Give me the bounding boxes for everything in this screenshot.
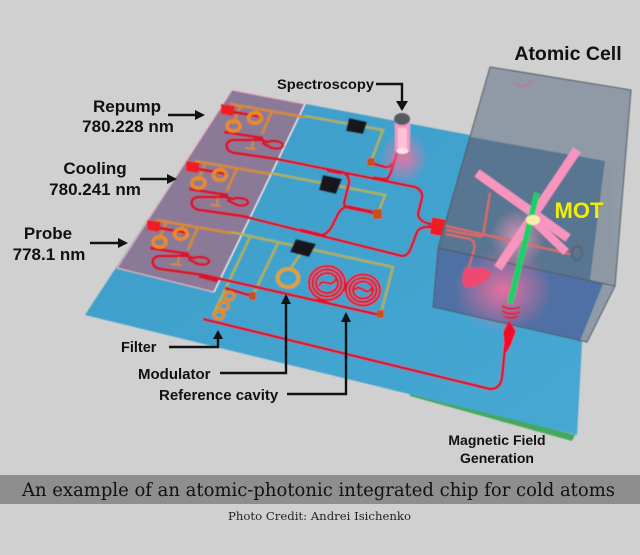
arrow: filter: [169, 330, 223, 347]
reference cavity spirals: [309, 266, 380, 306]
green beam: [510, 193, 537, 303]
probe laser unit: [147, 220, 231, 275]
yellow control lines: [213, 116, 393, 315]
cell right lower facet: [580, 284, 615, 342]
label: Probe: Probe: [24, 224, 72, 243]
label: Spectroscopy: Spectroscopy: [277, 77, 375, 92]
arrow: cooling: [140, 174, 177, 184]
top reflection: [515, 80, 532, 87]
overlay right border: [214, 104, 305, 292]
spectroscopy glow: [380, 132, 428, 184]
label: Magnetic Field Generation: Generation: [460, 450, 534, 466]
label: Probe: 778.1 nm: [13, 245, 85, 264]
pink beam 2: [477, 173, 568, 238]
cooling laser unit: [186, 161, 270, 216]
probe output stub: [199, 276, 218, 281]
arrow: spectroscopy: [376, 84, 408, 111]
MOT centre: [526, 215, 540, 225]
cell lower face: [433, 248, 615, 342]
cell right strip: [590, 161, 615, 286]
photo credit: Photo Credit: Andrei Isichenko: [228, 509, 411, 523]
pink beam 3: [535, 222, 566, 252]
pink glow: [453, 248, 553, 332]
arrow: modulator: [220, 294, 291, 373]
filter rings: [214, 292, 234, 319]
faded traces: [446, 193, 570, 280]
label: Repump: 780.228 nm: [82, 117, 174, 136]
label: Atomic Cell: Atomic Cell: [514, 43, 622, 65]
label: Cooling: Cooling: [63, 159, 127, 178]
caption band: [0, 475, 640, 504]
output coupler: [502, 306, 520, 318]
label: Reference cavity: Reference cavity: [159, 387, 279, 404]
magnetic field generation strip: [410, 391, 575, 441]
spectroscopy vapour cell: [394, 113, 410, 154]
arrow: reference cavity: [287, 312, 351, 394]
label: Cooling: 780.241 nm: [49, 180, 141, 199]
repump laser unit: [221, 104, 305, 159]
laser section overlay: [117, 90, 305, 292]
cell edges: [433, 67, 631, 342]
modulator chips: [290, 118, 367, 257]
output splitter block: [430, 217, 447, 237]
caption text: An example of an atomic-photonic integrated chip for cold atoms: [21, 479, 615, 501]
modulator ring: [278, 269, 298, 287]
chip substrate: [85, 90, 592, 435]
red waveguides: [203, 153, 505, 389]
atomic cell: [433, 67, 631, 342]
cell face over chip darkening: [438, 137, 605, 280]
arrow: probe: [90, 238, 128, 248]
chip artwork: [85, 67, 631, 441]
phase shifters: [249, 158, 384, 318]
repump bus thick stubs: [300, 170, 387, 235]
label: Magnetic Field Generation: Magnetic Field: [448, 432, 546, 448]
output taper: [503, 320, 516, 352]
label: Repump: Repump: [93, 97, 161, 116]
grating coupler left: [462, 268, 492, 287]
cell upper body: [438, 67, 631, 286]
small optics right: [572, 246, 582, 260]
pink beam 1: [498, 150, 577, 268]
label: MOT: MOT: [555, 198, 604, 223]
label: Filter: Filter: [121, 340, 157, 356]
label: Modulator: Modulator: [138, 366, 211, 383]
centre glow: [490, 208, 546, 268]
arrow: repump: [168, 110, 205, 120]
